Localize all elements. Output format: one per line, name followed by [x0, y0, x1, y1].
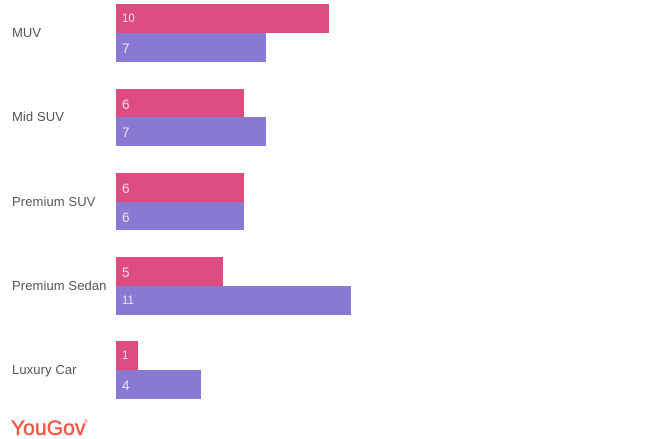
bar: Mid SUV purple 7: 7: [122, 125, 130, 140]
bar: MUV pink 10: [116, 4, 329, 33]
bar: Luxury Car purple 4: [116, 370, 201, 399]
label: MUV: MUV: [12, 25, 41, 40]
label: Mid SUV: Mid SUV: [12, 109, 64, 124]
label: Luxury Car: Luxury Car: [12, 362, 77, 377]
bar: Premium SUV purple 6: [116, 202, 244, 230]
bar: Premium Sedan purple 11: 11: [122, 295, 134, 307]
label: Premium SUV: Premium SUV: [12, 194, 95, 209]
bar: Luxury Car pink 1: [116, 341, 138, 370]
bar: Premium Sedan pink 5: 5: [122, 265, 130, 280]
bar: Premium SUV purple 6: 6: [122, 210, 130, 225]
bar: Mid SUV pink 6: 6: [122, 97, 130, 112]
row: Premium SUV: [12, 173, 244, 230]
row: Premium Sedan: [12, 257, 351, 315]
bar: Premium Sedan purple 11: [116, 286, 350, 315]
bar: MUV pink 10: 10: [122, 13, 135, 25]
bar: Premium SUV pink 6: [116, 173, 244, 202]
bar: Luxury Car pink 1: 1: [122, 350, 128, 362]
row: Mid SUV: [12, 89, 266, 146]
bar: Mid SUV pink 6: [116, 89, 244, 117]
row: MUV: [12, 4, 329, 62]
label: Premium Sedan: Premium Sedan: [12, 278, 107, 293]
bar: MUV purple 7: [116, 33, 266, 62]
bar: Premium SUV pink 6: 6: [122, 181, 130, 196]
bar: Mid SUV purple 7: [116, 117, 266, 146]
bar: Luxury Car purple 4: 4: [122, 378, 130, 393]
bar: MUV purple 7: 7: [122, 41, 130, 56]
bar: Premium Sedan pink 5: [116, 257, 222, 286]
logo: YouGov: ®: [84, 419, 88, 425]
